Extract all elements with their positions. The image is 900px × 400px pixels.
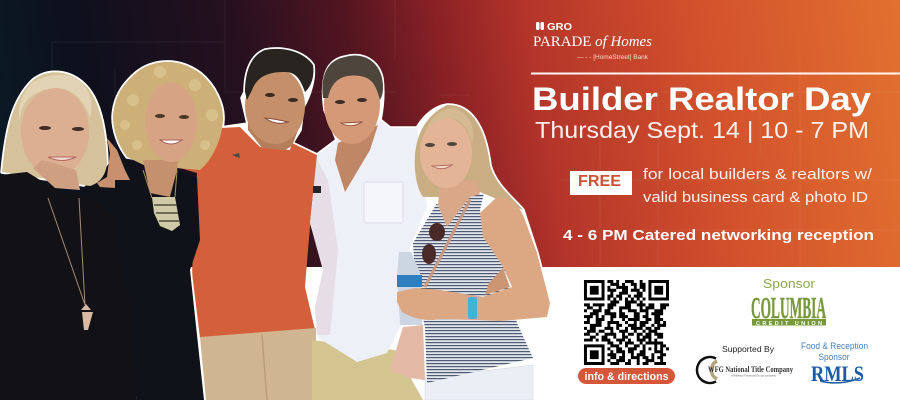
hair xyxy=(2,72,107,186)
facial features xyxy=(335,98,367,126)
face xyxy=(21,88,89,176)
HomeStreet Bank logo: — - - [HomeStreet] Bank xyxy=(577,55,649,61)
pen in pocket xyxy=(313,186,321,193)
RMLS logo: RMLS xyxy=(811,361,864,386)
neck xyxy=(33,160,80,190)
striped tank top xyxy=(413,193,533,383)
free badge: FREE xyxy=(578,173,621,190)
hair fringe xyxy=(420,108,473,150)
white shirt xyxy=(310,120,427,362)
free badge xyxy=(570,171,632,195)
date and time: Thursday Sept. 14 | 10 - 7 PM xyxy=(535,117,869,143)
info and directions pill: info & directions xyxy=(584,371,668,383)
wristband xyxy=(468,297,477,319)
partner's hand at waist xyxy=(485,268,510,295)
person: woman with curly hair xyxy=(80,62,223,400)
WFG National Title Company logo: WFG National Title Company xyxy=(708,365,793,374)
food and reception sponsor heading: Food & Reception xyxy=(801,341,868,351)
handbag xyxy=(390,325,425,380)
long necklace with pendant xyxy=(48,198,93,330)
hand on shoulder xyxy=(97,138,130,188)
person: blonde woman in black sweater xyxy=(0,72,137,400)
white pants xyxy=(425,365,533,400)
face xyxy=(324,64,380,144)
neck and chest xyxy=(438,180,480,228)
orange shirt xyxy=(180,127,318,338)
person: man in white shirt xyxy=(310,56,427,400)
eligibility text: for local builders & realtors w/ xyxy=(643,167,873,183)
title: Builder Realtor Day xyxy=(532,81,871,117)
shirt shadow xyxy=(310,160,338,335)
facial features xyxy=(39,126,84,160)
QR code xyxy=(584,281,669,364)
face xyxy=(245,68,305,144)
Columbia Credit Union logo: CREDIT UNION xyxy=(756,321,822,327)
hair top xyxy=(19,75,91,122)
event logo block xyxy=(533,21,652,61)
background gradient panel xyxy=(0,0,900,267)
icon: GRO mark xyxy=(536,22,544,30)
chest pocket xyxy=(364,182,403,223)
WFG National Title Company logo xyxy=(697,357,793,383)
bag strap xyxy=(425,200,470,287)
food and reception sponsor heading: Sponsor xyxy=(818,352,850,362)
neck xyxy=(248,118,300,150)
sunglasses xyxy=(422,223,445,264)
person: man in orange shirt xyxy=(180,49,318,400)
GRO logo: GRO xyxy=(547,21,572,33)
hair xyxy=(415,105,523,210)
white lower panel xyxy=(0,267,900,400)
person: woman in striped tank xyxy=(390,105,550,400)
face xyxy=(145,82,197,162)
open collar and neck xyxy=(335,125,378,192)
facial features xyxy=(425,142,457,169)
photo cutout halo xyxy=(2,49,550,325)
chest xyxy=(143,160,178,197)
hair highlights xyxy=(120,66,218,150)
eligibility text xyxy=(643,167,873,206)
facial features xyxy=(155,114,189,144)
reception note: 4 - 6 PM Catered networking reception xyxy=(563,228,874,244)
group photo of five people xyxy=(0,49,550,400)
facial features xyxy=(265,93,298,123)
Columbia Credit Union logo xyxy=(751,290,826,327)
khaki pants xyxy=(312,340,423,400)
sponsor heading: Sponsor xyxy=(763,276,816,291)
black dress xyxy=(80,157,204,400)
black sweater xyxy=(0,172,137,400)
eligibility text: valid business card & photo ID xyxy=(643,190,868,206)
divider xyxy=(531,72,900,74)
khaki shorts xyxy=(200,328,316,400)
arm and hand xyxy=(397,197,550,321)
statement necklace xyxy=(143,170,180,231)
water bottle xyxy=(397,252,422,325)
hair xyxy=(245,49,313,100)
face xyxy=(420,118,472,188)
Parade of Homes wordmark: PARADE of Homes xyxy=(533,34,652,50)
info and directions pill xyxy=(578,368,675,384)
hair xyxy=(322,56,383,100)
icon: WFG crescent xyxy=(697,357,717,383)
supported by heading: Supported By xyxy=(722,344,775,354)
curly hair xyxy=(113,62,223,170)
food and reception sponsor heading xyxy=(801,341,868,362)
WFG National Title Company logo: a Williston Financial Group company xyxy=(731,374,776,378)
logo tick xyxy=(221,151,240,158)
gap behind the couple xyxy=(187,267,193,293)
